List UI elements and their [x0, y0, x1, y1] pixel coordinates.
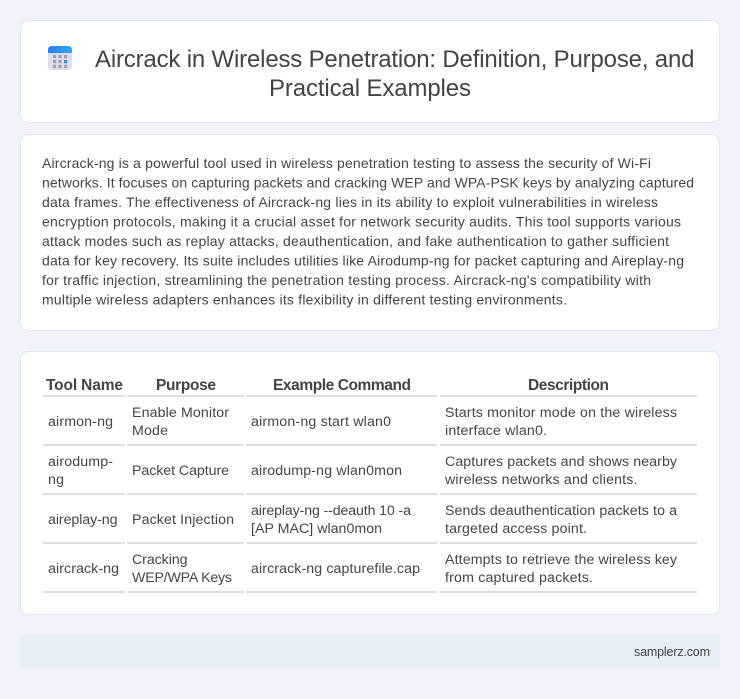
table row: aircrack-ng: aircrack-ng capturefile.cap — [251, 561, 420, 577]
description text: data frames. The effectiveness of Aircrack-ng lies in its ability to exploit vulnerabilities in wireless — [42, 194, 658, 210]
table row: aircrack-ng — [43, 552, 697, 593]
description text: multiple wireless adapters enhances its flexibility in different testing environments. — [42, 292, 567, 308]
footer source text: samplerz.com — [634, 645, 710, 659]
footer bar — [20, 635, 720, 668]
table row: airmon-ng: interface wlan0. — [445, 423, 547, 439]
table row: aircrack-ng: Attempts to retrieve the wireless key — [445, 552, 678, 568]
table row: aireplay-ng: aireplay-ng — [48, 512, 118, 528]
table row: aircrack-ng: aircrack-ng — [48, 561, 119, 577]
table row: aireplay-ng: aireplay-ng --deauth 10 -a — [251, 503, 411, 519]
table row: airmon-ng: Mode — [132, 423, 168, 439]
table row: airodump-ng — [43, 454, 697, 495]
table row: aireplay-ng: targeted access point. — [445, 521, 587, 537]
title — [95, 46, 694, 102]
description text — [42, 155, 694, 308]
icon: calendar — [48, 46, 72, 70]
description text: attack modes such as replay attacks, deauthentication, and fake authentication to gather sufficient — [42, 233, 669, 249]
table row: aircrack-ng: from captured packets. — [445, 570, 593, 586]
title: Practical Examples — [269, 75, 471, 102]
table row: aircrack-ng: WEP/WPA Keys — [132, 570, 232, 586]
table header: Description — [528, 377, 609, 394]
table row: aireplay-ng: Sends deauthentication packets to a — [445, 503, 677, 519]
table row: airodump-ng: Captures packets and shows nearby — [445, 454, 678, 470]
panel: tools table — [20, 352, 720, 614]
panel: description — [20, 134, 720, 330]
table row: airmon-ng: Starts monitor mode on the wireless — [445, 405, 677, 421]
description text: data for key recovery. Its suite includes utilities like Airodump-ng for packet capturing and Aireplay-ng — [42, 252, 684, 268]
panel: title card — [20, 20, 720, 122]
table row: airodump-ng: airodump- — [48, 454, 113, 470]
table header: Purpose — [156, 377, 216, 394]
title: Aircrack in Wireless Penetration: Definition, Purpose, and — [95, 46, 694, 73]
table header: Example Command — [273, 377, 411, 394]
table row: aireplay-ng: [AP MAC] wlan0mon — [251, 521, 382, 537]
description text: for traffic injection, streamlining the penetration testing process. Aircrack-ng's compatibility with — [42, 272, 651, 288]
table row: airmon-ng — [43, 405, 697, 446]
table header: Tool Name — [46, 377, 123, 394]
table row: airodump-ng: wireless networks and clients. — [444, 472, 638, 488]
table row: aireplay-ng — [43, 503, 697, 544]
table row: airodump-ng: ng — [48, 472, 64, 488]
table row: aireplay-ng: Packet Injection — [132, 512, 234, 528]
table row: airmon-ng: airmon-ng start wlan0 — [251, 414, 391, 430]
description text: encryption protocols, making it a crucial asset for network security audits. This tool supports various — [42, 214, 681, 230]
table row: airodump-ng: Packet Capture — [132, 463, 229, 479]
description text: Aircrack-ng is a powerful tool used in wireless penetration testing to assess the security of Wi-Fi — [42, 155, 651, 171]
table header — [43, 377, 697, 397]
table row: airmon-ng: airmon-ng — [48, 414, 113, 430]
table row: airmon-ng: Enable Monitor — [132, 405, 229, 421]
description text: networks. It focuses on capturing packets and cracking WEP and WPA-PSK keys by analyzing captured — [42, 174, 694, 190]
table row: aircrack-ng: Cracking — [132, 552, 188, 568]
table row: airodump-ng: airodump-ng wlan0mon — [251, 463, 402, 479]
